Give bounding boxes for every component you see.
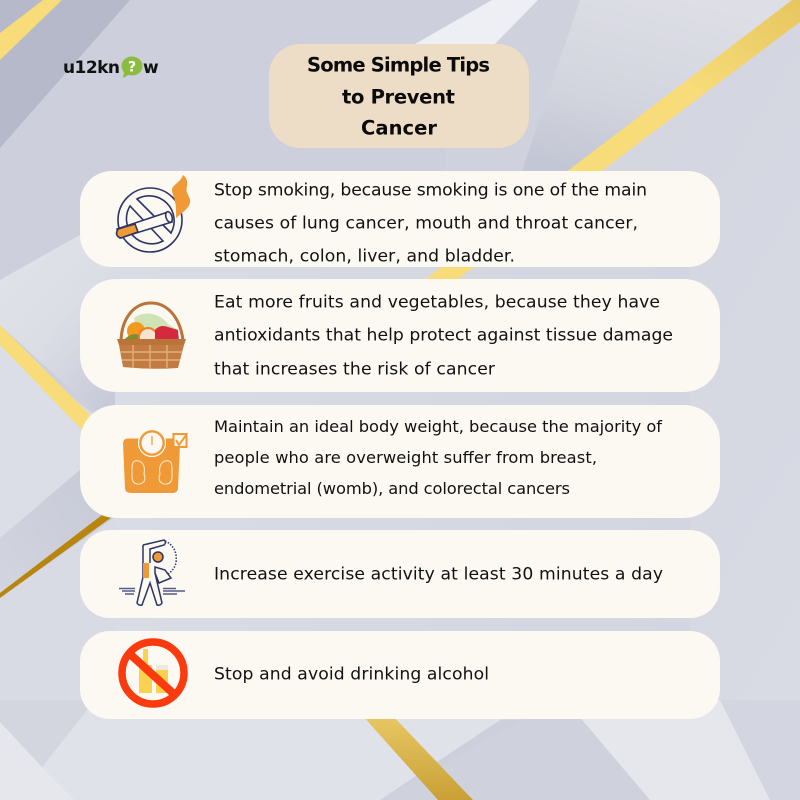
panel: body weight	[80, 405, 720, 518]
gold stripe: left	[0, 325, 100, 440]
tip text: causes of lung cancer, mouth and throat cancer,	[214, 214, 638, 234]
dark gold stripe: left	[0, 515, 112, 598]
title panel	[269, 44, 529, 148]
icon: no alcohol	[122, 642, 184, 704]
icon: question bubble: ?	[128, 60, 136, 76]
tip text: stomach, colon, liver, and bladder.	[214, 246, 515, 266]
gold stripe: top right	[418, 0, 800, 285]
tip text	[214, 417, 663, 498]
tip text: endometrial (womb), and colorectal cancers	[214, 479, 570, 498]
title: Some Simple Tips	[307, 54, 490, 76]
logo: w	[143, 58, 159, 78]
tip text: Stop and avoid drinking alcohol	[214, 664, 489, 684]
icon: basket	[117, 303, 186, 369]
tip text: Maintain an ideal body weight, because the majority of	[214, 417, 663, 436]
panel: alcohol	[80, 631, 720, 719]
icon: stretching figure	[119, 540, 185, 605]
icon: weighing scale	[123, 430, 187, 493]
tip text: people who are overweight suffer from breast,	[214, 448, 597, 467]
title	[307, 54, 490, 140]
tip text: that increases the risk of cancer	[214, 360, 496, 380]
tip text: Increase exercise activity at least 30 minutes a day	[214, 564, 663, 584]
tip text: Stop smoking, because smoking is one of the main	[214, 180, 647, 200]
tip text: antioxidants that help protect against tissue damage	[214, 326, 673, 346]
gold stripe: bottom	[362, 715, 473, 800]
logo: u12kn	[63, 58, 120, 78]
tip text	[214, 180, 647, 266]
gold stripe: top left	[0, 0, 62, 60]
tip text	[214, 292, 673, 380]
panel: exercise	[80, 530, 720, 618]
logo	[63, 56, 159, 78]
panel: fruits and vegetables	[80, 279, 720, 392]
panel: stop smoking	[80, 171, 720, 267]
icon: no smoking	[117, 175, 190, 252]
title: Cancer	[361, 116, 437, 140]
tip text: Eat more fruits and vegetables, because they have	[214, 292, 660, 312]
title: to Prevent	[342, 86, 455, 108]
